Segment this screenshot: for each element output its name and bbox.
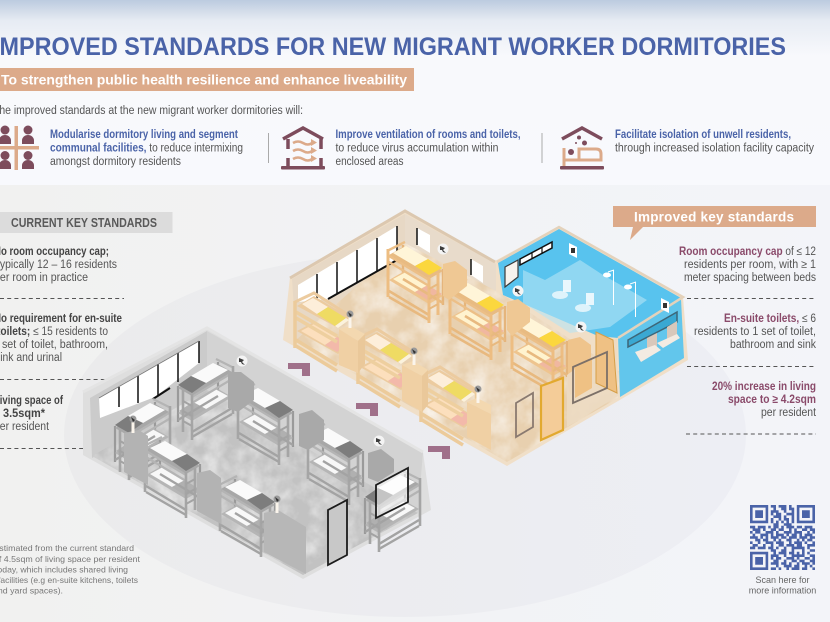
improved standard: occupancy: Room occupancy cap of ≤ 12 [679, 246, 816, 258]
heading: current key standards: CURRENT KEY STANDARDS [11, 216, 157, 230]
improved standard: toilets: En-suite toilets, ≤ 6 [724, 313, 816, 325]
improved standard: toilets [694, 313, 816, 351]
front row lockers [339, 326, 491, 450]
intro sentence: The improved standards at the new migrant worker dormitories will: [0, 105, 303, 117]
benefit text: modularise: Modularise dormitory living and segment [50, 129, 238, 141]
current standard: toilets: toilets; ≤ 15 residents to [0, 326, 108, 338]
current standard: occupancy: typically 12 – 16 residents [0, 259, 117, 271]
current standard: living space [0, 395, 63, 433]
grey room windows [99, 341, 199, 418]
benefit text: isolation: through increased isolation facility capacity [615, 142, 814, 154]
icon: ventilated house [281, 128, 325, 170]
subtitle banner [0, 68, 414, 91]
grey room bunks [115, 359, 420, 557]
benefit text: isolation: Facilitate isolation of unwell residents, [615, 129, 791, 141]
benefit text: ventilation: to reduce virus accumulation within [336, 142, 498, 154]
current standard: toilets [0, 313, 122, 364]
grey room wall fans [130, 356, 384, 513]
improved standard: toilets: bathroom and sink [730, 339, 816, 351]
bathroom [497, 227, 684, 397]
grey room door [328, 500, 347, 565]
QR code [750, 506, 815, 569]
heading: improved key standards [613, 206, 816, 240]
wall fans [346, 244, 586, 403]
benefit text: ventilation: enclosed areas [336, 156, 404, 168]
arrows between rooms [288, 363, 450, 459]
icon: segmented residents [0, 126, 39, 170]
grey current dormitory room [83, 327, 431, 579]
grey room lockers [124, 372, 394, 574]
benefit text: isolation [615, 129, 814, 154]
improved standard: toilets: residents to 1 set of toilet, [694, 326, 816, 338]
subtitle banner: To strengthen public health resilience and enhance liveability [1, 72, 407, 88]
bathroom signs [569, 243, 669, 313]
bedroom windows [298, 226, 483, 302]
sinks [635, 321, 680, 362]
benefit text: ventilation: Improve ventilation of rooms and toilets, [336, 129, 520, 141]
benefit text: modularise: communal facilities, to reduce intermixing [50, 142, 243, 154]
heading: improved key standards: Improved key standards [634, 210, 794, 224]
lower panel background [0, 185, 830, 622]
improved standard: living space: 20% increase in living [712, 381, 816, 393]
heading: current key standards [0, 212, 172, 233]
front row bunks [295, 293, 477, 445]
improved standard: occupancy [679, 246, 816, 284]
benefit text: modularise: amongst dormitory residents [50, 156, 181, 168]
benefit text: modularise [50, 129, 243, 168]
improved standard: living space: space to ≥ 4.2sqm [728, 394, 816, 406]
QR caption: more information [749, 586, 816, 596]
toilets and showers [552, 270, 636, 317]
bathroom window [505, 242, 552, 287]
footnote: facilities (e.g en-suite kitchens, toilets [0, 575, 138, 585]
back row lockers [443, 261, 591, 395]
improved standard: occupancy: meter spacing between beds [684, 272, 816, 284]
title: IMPROVED STANDARDS FOR NEW MIGRANT WORKER DORMITORIES [0, 33, 786, 61]
improved standard: living space [712, 381, 817, 419]
improved dormitory room [283, 211, 688, 466]
improved standard: living space: per resident [761, 407, 817, 419]
current standard: occupancy [0, 246, 117, 284]
inner door and cupboard [573, 332, 617, 403]
benefit text: ventilation [336, 129, 520, 168]
side window [516, 393, 533, 437]
back row bunks [388, 242, 567, 395]
partition wall [567, 338, 618, 427]
header background [0, 0, 830, 186]
background ellipse [64, 253, 746, 617]
footnote [0, 543, 141, 596]
main door [541, 378, 563, 440]
mirror strip [628, 312, 677, 347]
grey room end window [376, 468, 408, 518]
improved standard: occupancy: residents per room, with ≥ 1 [684, 259, 816, 271]
icon: isolation bed in house [560, 128, 604, 170]
QR caption [749, 575, 816, 596]
QR caption: Scan here for [755, 575, 810, 585]
